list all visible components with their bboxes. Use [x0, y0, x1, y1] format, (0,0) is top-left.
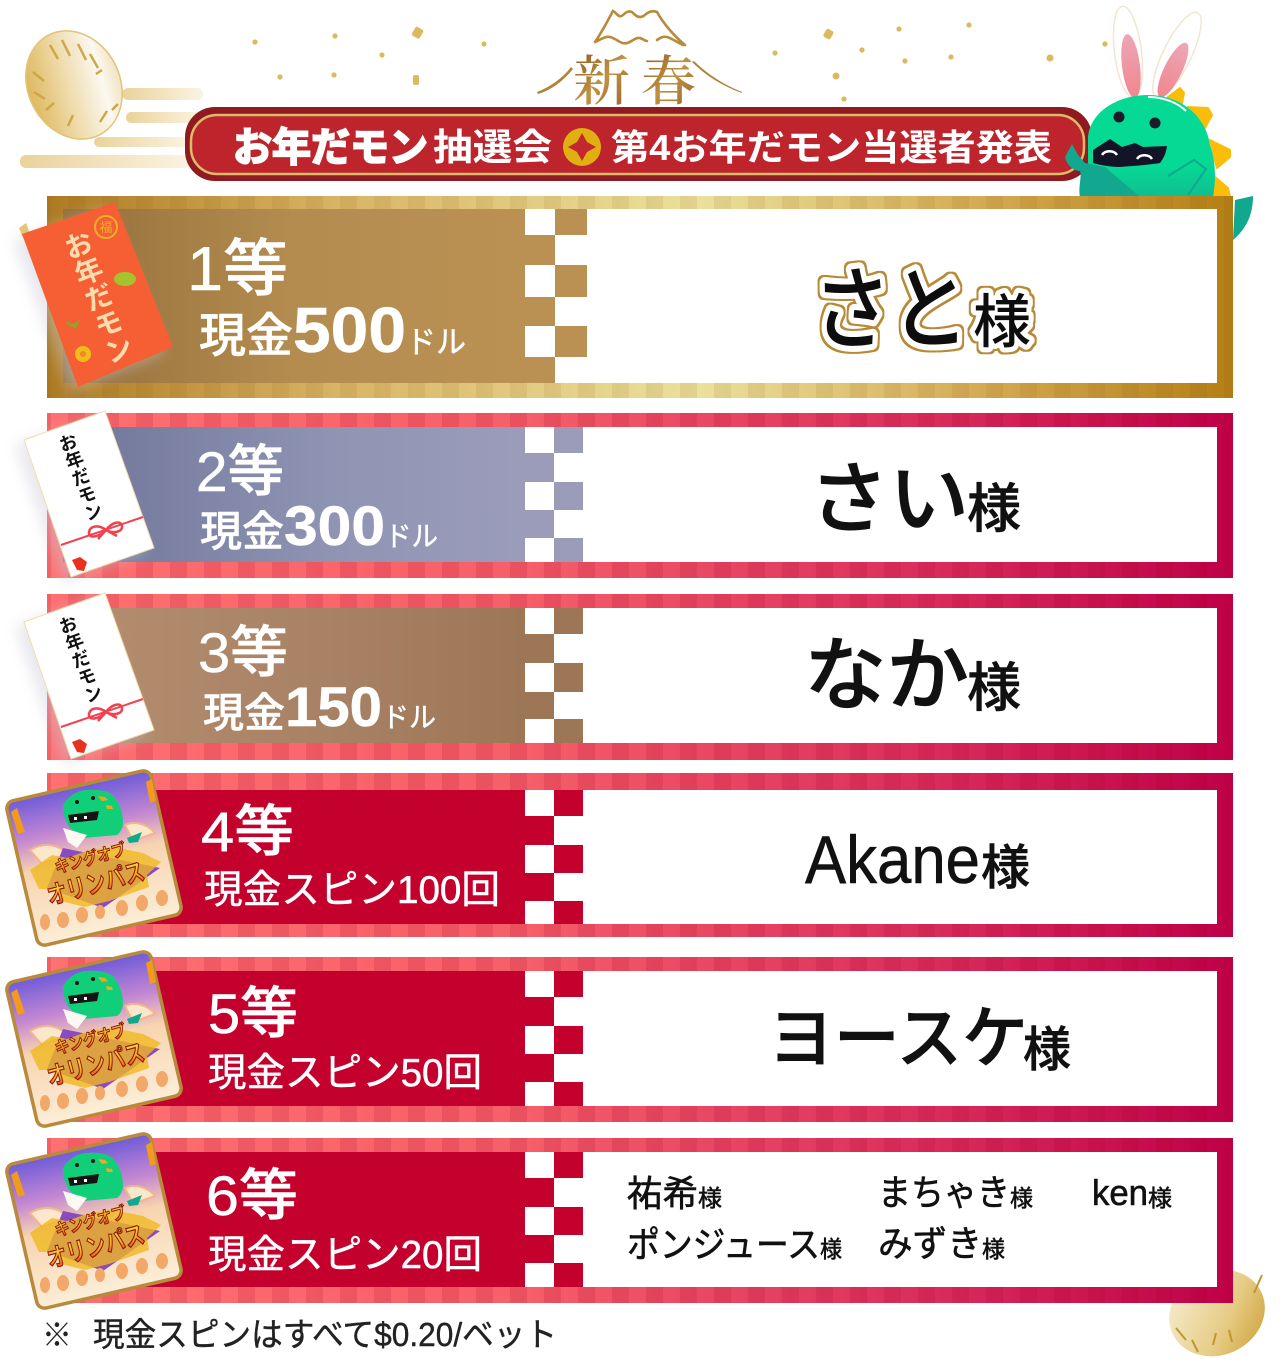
prize 6 winners list: 様 [1010, 1185, 1033, 1211]
prize 2 rank: 2等 [196, 440, 284, 503]
icon: game tile King of Olympus, prize 5: オリンパス [44, 1039, 148, 1092]
prize 4 rank: 4等 [201, 800, 294, 863]
icon: red envelope, prize 1: 福 [99, 220, 113, 235]
icon: red envelope, prize 1: お年だモン [58, 226, 137, 368]
prize 2 amount [200, 494, 438, 557]
banner text: draw event: 抽選会 [433, 127, 552, 168]
icon: white noshi envelope, prize 3 [16, 593, 154, 764]
icon: game tile King of Olympus, prize 6: オリンパス [44, 1221, 148, 1274]
icon: game tile King of Olympus, prize 6: キングオブ [53, 1202, 128, 1240]
prize 6 winners list: ken [1092, 1172, 1148, 1213]
prize 5 rank: 5等 [208, 982, 298, 1045]
prize 3 amount: 150 [285, 675, 382, 738]
prize 6 winners list: 祐希 [627, 1173, 698, 1214]
prize 6 winners list: 様 [982, 1236, 1005, 1262]
decoration: mochi coin bottom right [1155, 1254, 1279, 1359]
prize 2 amount: 300 [284, 494, 385, 557]
prize 2 amount: ドル [385, 521, 438, 552]
prize 6 rank: 6等 [206, 1164, 298, 1227]
panel: prize 4 [47, 773, 1233, 937]
prize 4 winner: 様 [981, 842, 1030, 895]
panel: prize 3 [47, 594, 1233, 760]
icon: game tile King of Olympus, prize 4: オリンパス [44, 858, 148, 911]
prize 1 amount: 現金 [199, 309, 293, 362]
decoration: gold confetti [252, 22, 1108, 102]
icon: red envelope, prize 1 [14, 202, 173, 393]
prize 6 winners list [627, 1172, 1172, 1265]
title banner [185, 107, 1092, 181]
footnote: ※ [42, 1317, 72, 1353]
heading emblem: Mt. Fuji and 新春: 春 [641, 52, 696, 112]
banner logo text: お年だモン [233, 126, 428, 170]
prize 3 amount [203, 675, 436, 738]
prize 5 winner: 様 [1023, 1024, 1071, 1077]
prize 6 winners list: みずき [878, 1223, 982, 1264]
panel: prize 5 [47, 957, 1233, 1122]
icon: white noshi envelope, prize 3: お年だモン [55, 612, 105, 706]
prize 1 amount [199, 294, 466, 366]
panel: prize 6 [47, 1138, 1233, 1303]
prize 5 reward: 現金スピン50回 [208, 1052, 482, 1095]
panel: prize 2 [47, 413, 1233, 578]
prize 6 winners list: 様 [698, 1185, 722, 1211]
prize 1 amount: ドル [406, 325, 466, 360]
icon: white noshi envelope, prize 2 [16, 411, 154, 582]
prize 3 rank: 3等 [198, 621, 288, 684]
prize 6 winners list: 様 [1148, 1185, 1172, 1211]
footnote: 現金スピンはすべて$0.20/ベット [93, 1316, 557, 1353]
prize 6 winners list: まちゃき [878, 1172, 1010, 1213]
banner text: winners announcement: 第4お年だモン当選者発表 [611, 127, 1052, 168]
decoration: flying mochi coin with gold clouds [8, 14, 203, 168]
prize 1 rank: 1等 [187, 235, 288, 304]
prize 3 amount: 現金 [203, 690, 285, 736]
icon: gold coin [563, 128, 601, 166]
prize 2 winner: さい [809, 455, 969, 543]
prize 2 winner: 様 [967, 480, 1021, 539]
prize 6 winners list: ポンジュース [627, 1224, 820, 1265]
prize 1 amount: 500 [293, 294, 406, 366]
heading emblem: Mt. Fuji and 新春: 新 [573, 52, 630, 112]
icon: game tile King of Olympus, prize 4: キングオブ [53, 839, 128, 877]
icon: white noshi envelope, prize 2: お年だモン [55, 430, 105, 524]
prize 6 reward: 現金スピン20回 [208, 1234, 482, 1277]
panel: prize 1 [47, 196, 1233, 398]
heading emblem: Mt. Fuji and 新春 [537, 11, 742, 112]
prize 6 winners list: 様 [820, 1236, 842, 1262]
prize 1 winner: 様 [973, 290, 1031, 355]
prize 1 winner: さと [813, 261, 969, 361]
icon: game tile King of Olympus, prize 4 [5, 769, 183, 947]
prize 3 amount: ドル [382, 702, 436, 733]
icon: game tile King of Olympus, prize 5 [5, 950, 183, 1128]
icon: game tile King of Olympus, prize 5: キングオブ [53, 1020, 128, 1058]
prize 5 winner: ヨースケ [768, 1001, 1028, 1077]
prize 4 reward: 現金スピン100回 [204, 869, 500, 912]
icon: game tile King of Olympus, prize 6 [5, 1132, 183, 1310]
prize 3 winner: なか [804, 631, 969, 720]
prize 4 winner: Akane [805, 822, 980, 898]
prize 3 winner: 様 [967, 659, 1021, 718]
dinosaur mascot with rabbit ears [1065, 5, 1253, 240]
prize 2 amount: 現金 [200, 508, 284, 555]
